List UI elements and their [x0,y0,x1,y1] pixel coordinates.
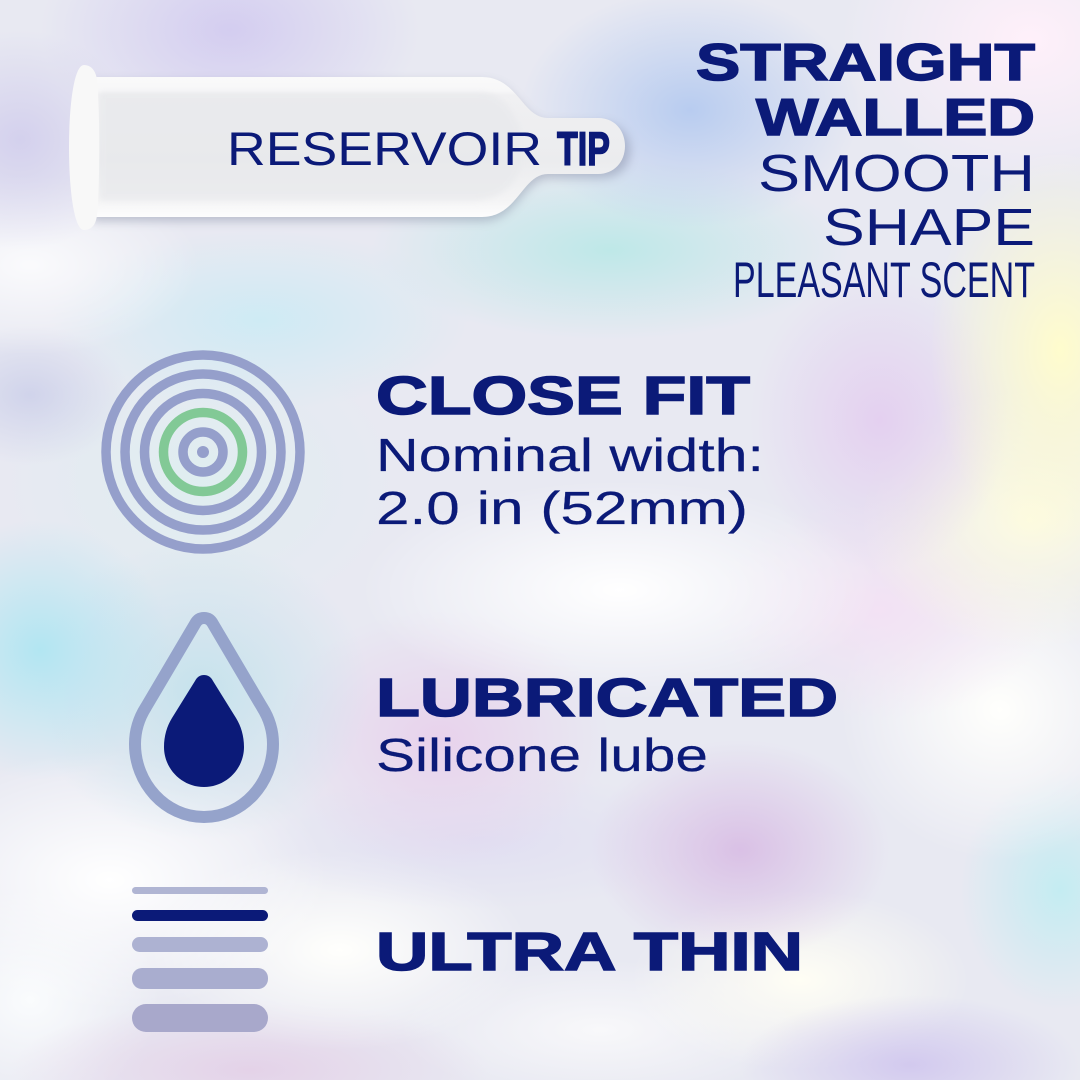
feature list: shape and scent: STRAIGHT [696,34,1035,92]
text block: close fit: Nominal width: [376,429,764,481]
rim [69,65,99,230]
text block: close fit [376,366,764,534]
text block: lubricated: LUBRICATED [376,668,838,728]
feature list: shape and scent [696,34,1035,308]
feature list: shape and scent: SHAPE [823,199,1035,257]
icon: concentric rings [106,355,300,549]
illustration: condom with reservoir tip [69,65,630,230]
text block: close fit: CLOSE FIT [376,366,750,426]
feature list: shape and scent: SMOOTH [758,145,1035,203]
icon: lubricant drop [135,618,273,817]
label: reservoir tip: RESERVOIR [227,122,542,175]
text block: ultra thin: ULTRA THIN [376,922,803,982]
feature list: shape and scent: WALLED [756,89,1035,147]
text block: lubricated [376,668,838,781]
text block: close fit: 2.0 in (52mm) [376,482,748,534]
label: reservoir tip: TIP [557,122,610,175]
icon: thickness bars [132,887,268,1032]
text block: lubricated: Silicone lube [376,729,708,781]
